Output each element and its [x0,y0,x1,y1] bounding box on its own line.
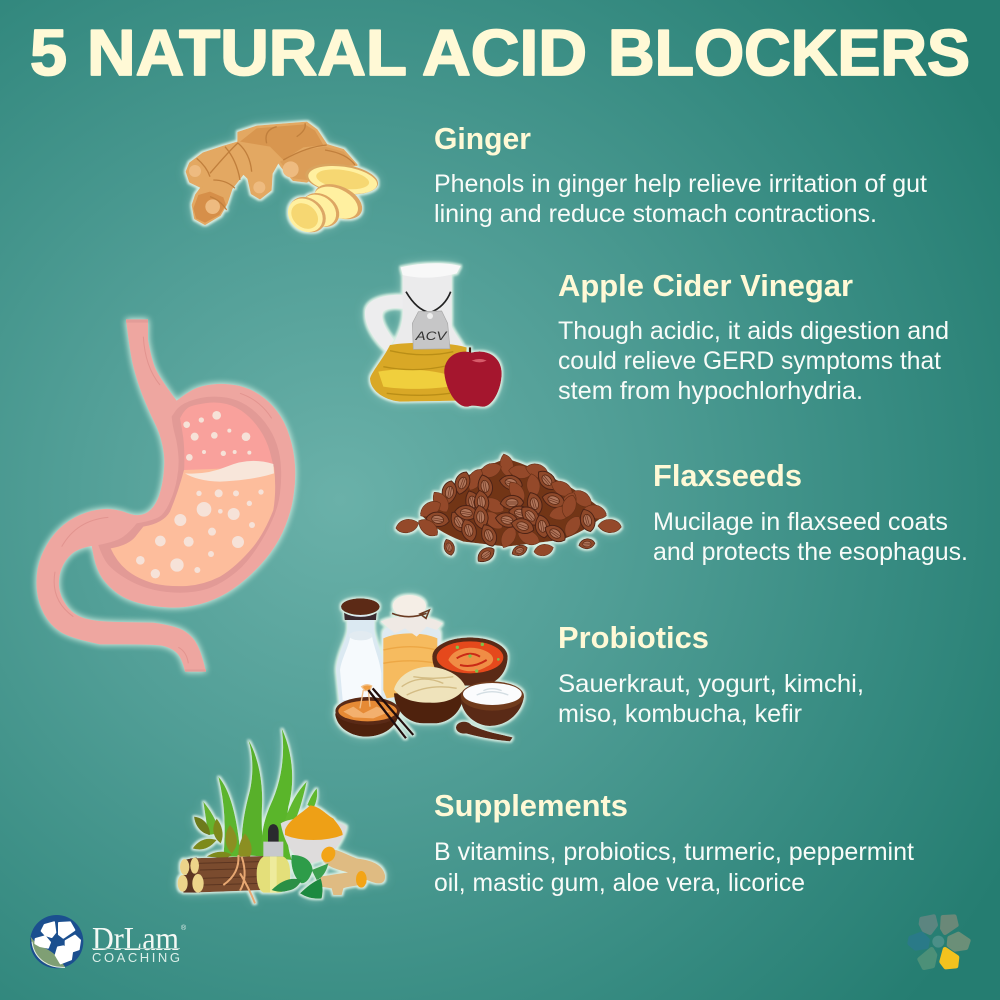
title: BLOCKERS [608,16,970,89]
heading and text: probiotics: miso, kombucha, kefir [558,700,802,728]
icon: flaxseeds [395,453,622,565]
logo: DrLam Coaching: ® [181,924,187,932]
icon: faint flower mark [910,917,968,968]
heading and text: supplements: B vitamins, probiotics, turmeric, peppermint [434,838,914,866]
heading and text: flaxseeds [653,458,968,566]
title: ACID [422,16,587,89]
heading and text: apple cider vinegar: could relieve GERD symptoms that [558,347,941,375]
heading and text: flaxseeds: Mucilage in flaxseed coats [653,508,948,536]
icon: ginger [187,123,380,240]
heading and text: apple cider vinegar: Though acidic, it aids digestion and [558,317,949,345]
icon: stomach [36,319,295,672]
logo: DrLam Coaching: COACHING [92,950,180,965]
heading and text: apple cider vinegar: stem from hypochlorhydria. [558,377,863,405]
title: NATURAL [87,16,407,89]
title [30,16,970,89]
heading and text: flaxseeds: and protects the esophagus. [653,538,968,566]
heading and text: ginger: Phenols in ginger help relieve irritation of gut [434,170,927,198]
logo: DrLam Coaching: DrLam [92,921,179,958]
heading and text: ginger: Ginger [434,121,531,156]
heading and text: supplements [434,788,914,897]
icon: apple cider vinegar: ACV [414,329,448,343]
title: 5 [30,16,67,89]
icon: supplements [178,728,385,903]
heading and text: supplements: Supplements [434,788,628,823]
icon: apple cider vinegar [365,263,502,407]
icon: probiotics [335,595,524,741]
heading and text: probiotics: Probiotics [558,620,709,655]
heading and text: probiotics [558,620,864,728]
heading and text: supplements: oil, mastic gum, aloe vera, licorice [434,869,805,897]
heading and text: apple cider vinegar [558,268,949,405]
heading and text: ginger: lining and reduce stomach contractions. [434,200,877,228]
logo: DrLam Coaching [30,915,187,968]
heading and text: probiotics: Sauerkraut, yogurt, kimchi, [558,670,864,698]
heading and text: ginger [434,121,927,228]
heading and text: apple cider vinegar: Apple Cider Vinegar [558,268,853,303]
heading and text: flaxseeds: Flaxseeds [653,458,802,493]
